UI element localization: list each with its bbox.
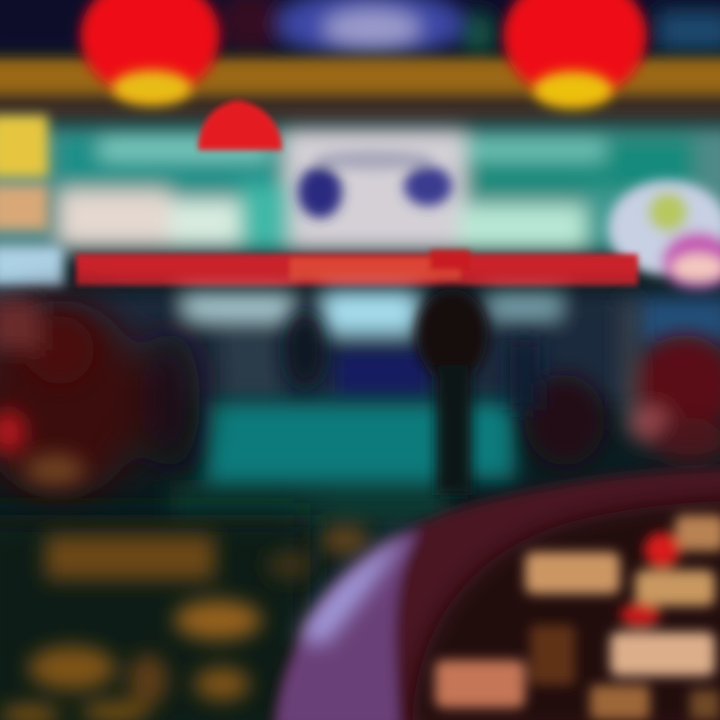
bowl rim [272,468,720,720]
bowl interior [412,500,720,720]
panel: left stall signs [0,115,64,338]
food pieces [435,515,720,720]
icon: rainbow arch [608,180,720,292]
panel: teal floor [170,402,515,525]
panel: wooden beam [0,58,720,120]
red lantern left [80,0,220,106]
figure silhouette small [285,312,605,465]
left crowd highlights [0,300,94,486]
red banner [76,250,638,286]
orange blurred lights [0,524,370,720]
panel: lower-left ground [0,515,310,720]
figure silhouette [416,289,488,495]
panel: upper signboard [0,125,720,253]
signboard emblems [298,150,452,218]
panel: top ceiling [0,0,720,55]
panel: right crowd [622,300,720,462]
panel: left crowd [0,300,200,500]
red lantern right [503,0,647,109]
panel: mid-ground crowd [0,290,720,402]
red lantern small [198,100,282,150]
bowl highlight [298,530,410,645]
